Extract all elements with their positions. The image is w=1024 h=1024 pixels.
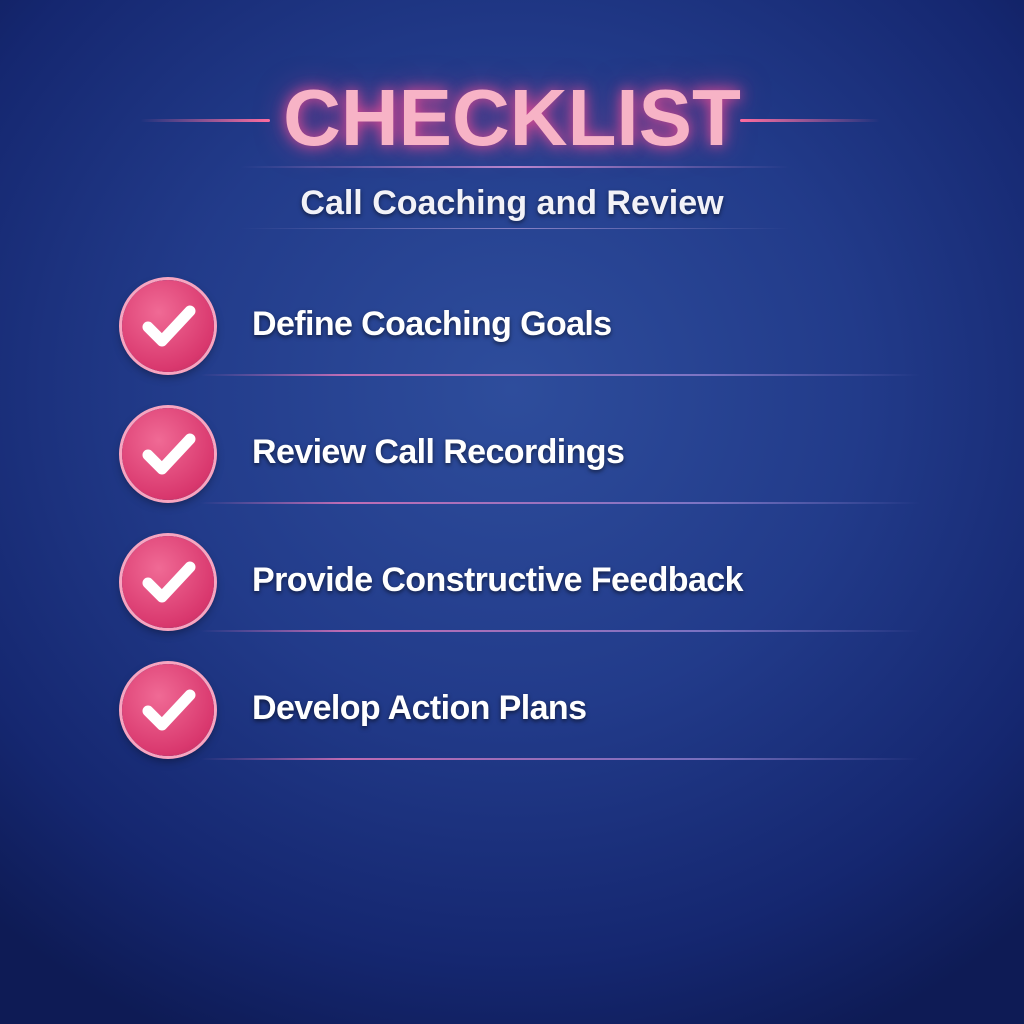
text: Provide Constructive Feedback (252, 561, 743, 599)
item 2 (117, 405, 900, 509)
text: Review Call Recordings (252, 433, 624, 471)
title glow line left (140, 119, 270, 122)
subtitle: Call Coaching and Review (300, 184, 724, 222)
item 3 (117, 533, 901, 637)
title: CHECKLIST (283, 73, 741, 162)
title glow line right (740, 119, 880, 122)
icon: check (122, 536, 214, 628)
icon: check (122, 280, 214, 372)
divider top (240, 166, 790, 168)
icon: check (122, 664, 214, 756)
item 1 (117, 277, 900, 382)
text: Define Coaching Goals (252, 305, 612, 343)
text: Develop Action Plans (252, 689, 586, 727)
divider bottom (240, 228, 790, 229)
item 4 (117, 661, 901, 765)
icon: check (122, 408, 214, 500)
